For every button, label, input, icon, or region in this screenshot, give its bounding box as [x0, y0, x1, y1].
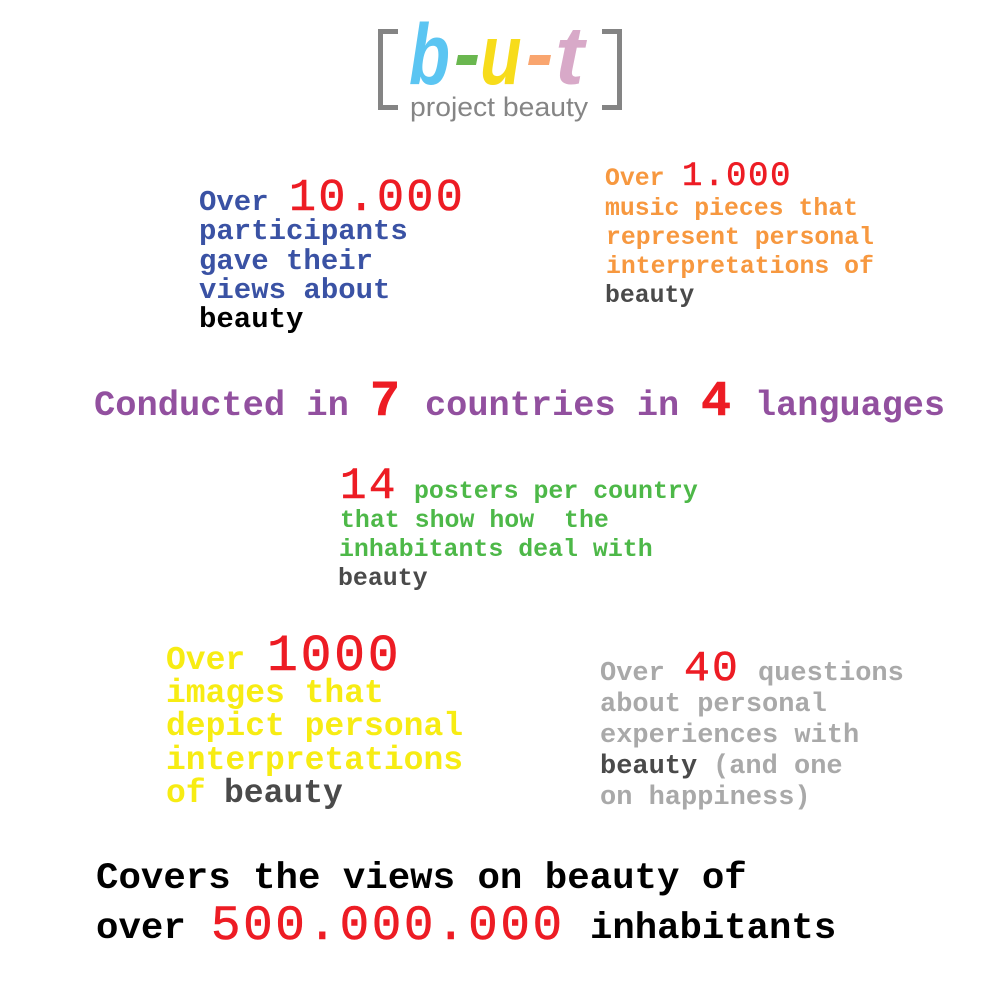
- text block: questions: about personal: [600, 690, 827, 720]
- number: 7: 7: [370, 374, 403, 431]
- number: 14: 14: [340, 462, 398, 512]
- text block: images: interpretations: [166, 742, 463, 779]
- text block: posters: [338, 462, 698, 593]
- text block: music pieces: represent personal: [606, 224, 874, 252]
- text block: participants: Over: [199, 186, 269, 219]
- text block: images: [166, 628, 463, 812]
- text block: posters: beauty: [338, 565, 428, 593]
- text block: inhabitants: inhabitants: [590, 908, 836, 950]
- text block: participants: [199, 173, 465, 336]
- text block: questions: on happiness): [600, 783, 811, 813]
- text block: questions: beauty: [600, 752, 697, 782]
- text block: questions: [600, 644, 904, 813]
- text block: inhabitants: Covers the views on beauty of: [96, 858, 747, 900]
- logo letter t: t: [555, 10, 588, 103]
- text block: images: depict personal: [166, 708, 463, 745]
- number: 10.000: 10.000: [289, 173, 465, 224]
- text block: countries and languages: languages: [755, 386, 945, 426]
- text block: posters: posters per country: [414, 478, 698, 506]
- logo tagline: project beauty: [410, 92, 589, 122]
- text block: posters: that show how the: [340, 507, 609, 535]
- text block: participants: beauty: [199, 303, 303, 336]
- number: 40: 40: [684, 644, 740, 693]
- text block: countries and languages: Conducted in: [94, 386, 349, 426]
- text block: music pieces: Over: [605, 165, 665, 193]
- logo letter u: u: [480, 8, 522, 103]
- text block: questions: (and one: [713, 752, 843, 782]
- logo dash orange: [528, 55, 551, 65]
- icon: left bracket: [380, 32, 398, 108]
- text block: participants: gave their: [199, 245, 373, 278]
- number: 1000: 1000: [267, 628, 401, 686]
- text block: countries and languages: [94, 374, 945, 431]
- text block: images: beauty: [224, 775, 343, 812]
- logo letter b: b: [409, 7, 450, 103]
- text block: music pieces: [605, 158, 874, 310]
- text block: images: of: [166, 775, 206, 812]
- logo: b-u-t project beauty: [380, 7, 620, 122]
- text block: questions: Over: [600, 659, 665, 689]
- text block: inhabitants: over: [96, 908, 186, 950]
- text block: music pieces: beauty: [605, 282, 694, 310]
- text block: participants: participants: [199, 215, 408, 248]
- text block: inhabitants: [96, 858, 836, 954]
- text block: questions: questions: [758, 659, 904, 689]
- number: 4: 4: [701, 374, 734, 431]
- text block: music pieces: interpretations of: [606, 253, 874, 281]
- text block: participants: views about: [199, 274, 390, 307]
- text block: posters: inhabitants deal with: [339, 536, 653, 564]
- number: 1.000: 1.000: [682, 158, 792, 196]
- number: 500.000.000: 500.000.000: [211, 898, 565, 954]
- text block: music pieces: music pieces that: [605, 195, 858, 223]
- text block: questions: experiences with: [600, 721, 859, 751]
- text block: countries and languages: countries in: [425, 386, 679, 426]
- logo dash green: [456, 55, 478, 65]
- text block: images: images that: [166, 675, 384, 712]
- text block: images: Over: [166, 642, 245, 679]
- icon: right bracket: [602, 32, 620, 108]
